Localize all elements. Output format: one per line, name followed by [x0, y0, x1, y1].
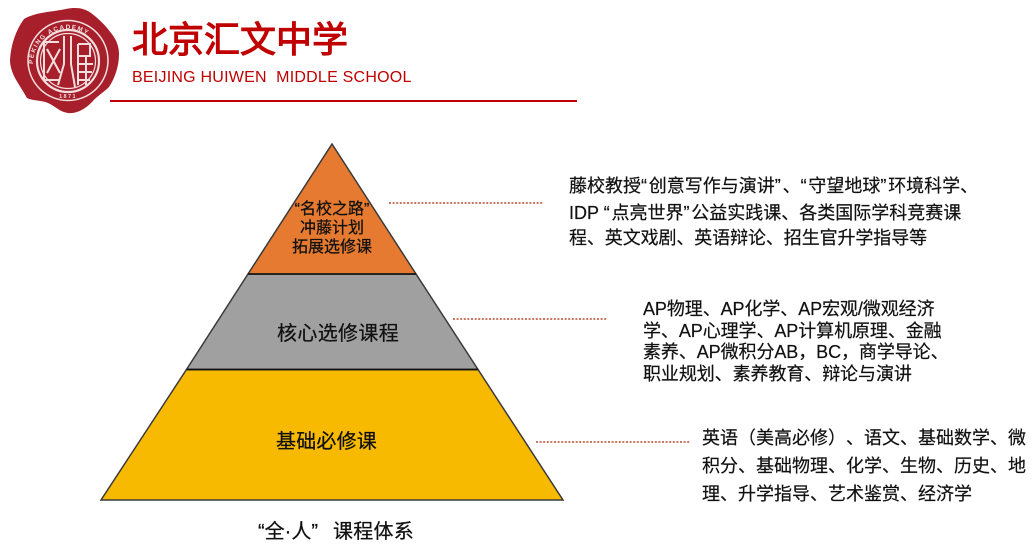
top layer label: 拓展选修课	[292, 239, 372, 256]
caption: 课程体系	[333, 521, 414, 543]
text block: top layer courses: 程、英文戏剧、英语辩论、招生官升学指导等	[569, 228, 927, 248]
header	[10, 8, 577, 114]
pyramid base layer	[101, 370, 563, 500]
text block: core elective courses	[642, 298, 949, 384]
title: 北京汇文中学	[132, 19, 348, 60]
caption	[258, 520, 414, 543]
icon: school wax seal: 1871	[59, 94, 77, 100]
dotted leader top	[389, 202, 543, 204]
icon: school wax seal: PEKING ACADEMY	[28, 24, 89, 64]
text block: foundation courses	[702, 428, 1026, 504]
text block: core elective courses: 学、AP心理学、AP计算机原理、金融	[643, 320, 942, 340]
text block: foundation courses: 理、升学指导、艺术鉴赏、经济学	[702, 484, 972, 504]
top layer label	[292, 200, 372, 256]
top layer label: 冲藤计划	[300, 220, 364, 237]
text block: foundation courses: 积分、基础物理、化学、生物、历史、地	[702, 456, 1026, 476]
text block: top layer courses: 藤校教授“创意写作与演讲”、“守望地球”环境科学、	[569, 176, 978, 196]
pyramid middle layer	[186, 274, 478, 370]
text block: core elective courses: AP物理、AP化学、AP宏观/微观经济	[643, 298, 935, 318]
text block: core elective courses: 素养、AP微积分AB，BC，商学导论、	[643, 342, 949, 362]
header rule	[110, 100, 577, 102]
text block: core elective courses: 职业规划、素养教育、辩论与演讲	[643, 364, 912, 384]
dotted leader middle	[453, 318, 607, 320]
pyramid top layer	[248, 144, 416, 274]
text block: foundation courses: 英语（美高必修）、语文、基础数学、微	[702, 428, 1026, 448]
layer divider top	[248, 273, 416, 275]
text block: top layer courses	[569, 176, 978, 248]
top layer label: “名校之路”	[295, 201, 369, 218]
text block: top layer courses: IDP “点亮世界”公益实践课、各类国际学科竞赛课	[569, 203, 961, 223]
icon: school wax seal	[10, 8, 119, 114]
layer divider middle	[187, 368, 478, 370]
dotted leader base	[536, 441, 690, 443]
subtitle: BEIJING HUIWEN MIDDLE SCHOOL	[132, 69, 412, 86]
caption: “全·人”	[258, 521, 318, 543]
base layer label: 基础必修课	[276, 431, 377, 453]
middle layer label: 核心选修课程	[277, 323, 399, 345]
